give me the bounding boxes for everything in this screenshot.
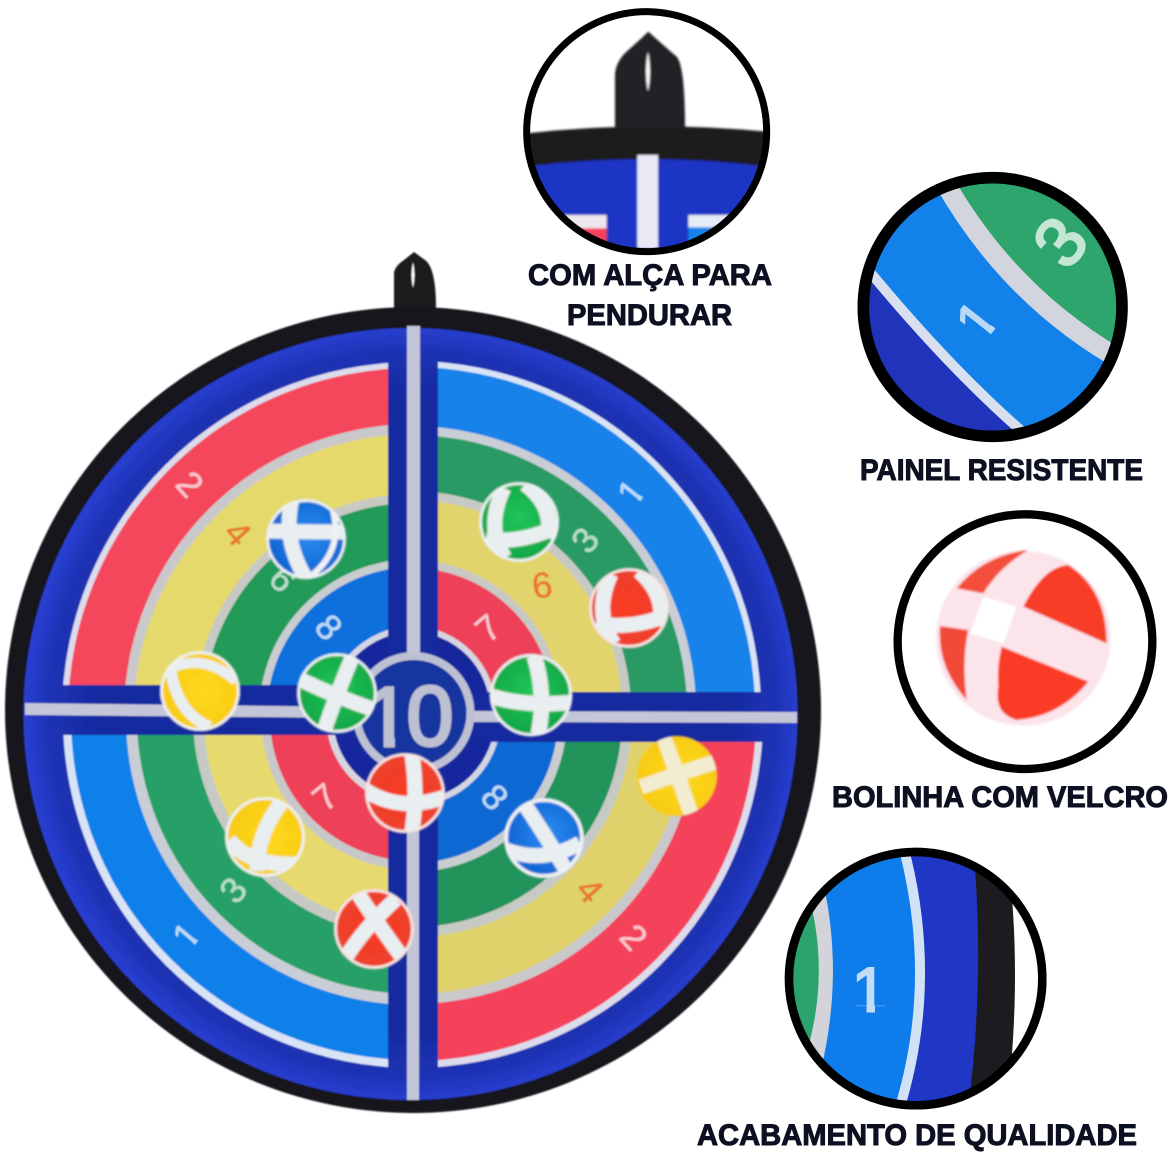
ring numbers: 1: [609, 472, 653, 513]
ball: yellow left: [160, 651, 240, 731]
ring numbers: 7: [304, 775, 346, 819]
ring numbers: 7: [467, 606, 509, 650]
ring numbers: 3: [211, 869, 255, 911]
ring numbers: 6: [529, 563, 555, 607]
label: acabamento de qualidade: ACABAMENTO DE QUALIDADE: [697, 1119, 1137, 1152]
label: pendurar: PENDURAR: [567, 299, 732, 332]
ring numbers: 2: [168, 463, 212, 505]
magnified loop circle: [510, 12, 777, 260]
hanging loop: [394, 252, 436, 308]
label: bolinha com velcro: BOLINHA COM VELCRO: [832, 781, 1168, 814]
bullseye 10: 1: [364, 670, 411, 764]
ball: green left centre: [297, 653, 377, 733]
callout: resistant panel: [858, 172, 1142, 481]
magnified ring circle: 3: [1018, 203, 1103, 281]
velcro balls: [160, 482, 717, 969]
ring numbers: 6: [261, 558, 305, 600]
ball: blue bottom right: [504, 798, 584, 878]
ball: green right centre: [488, 654, 574, 736]
quadrant: top left rings: [62, 362, 390, 686]
label: com alça: COM ALÇA PARA: [528, 259, 772, 292]
quadrant: bottom right rings: [436, 740, 764, 1068]
ring numbers: 3: [563, 520, 607, 561]
cross bars: [25, 326, 797, 1100]
ball: red centre: [365, 753, 445, 833]
ball: green top right: [479, 482, 559, 562]
label: painel resistente: PAINEL RESISTENTE: [860, 454, 1143, 487]
magnified ball circle: [898, 514, 1152, 769]
ball: yellow right: [637, 736, 717, 816]
magnified ring circle: 1: [943, 289, 1011, 351]
callout: velcro ball: [832, 514, 1168, 814]
ring numbers: 4: [568, 869, 612, 911]
magnified ring circle: [858, 172, 1128, 442]
ring numbers: 8: [307, 606, 351, 648]
ring numbers: 4: [216, 512, 260, 554]
callout: quality finish: [697, 847, 1137, 1152]
blue board face: [24, 328, 798, 1100]
ring numbers: 8: [473, 776, 517, 818]
magnified edge circle: [773, 847, 1042, 1107]
ring numbers: [164, 463, 656, 958]
dartboard: [5, 252, 821, 1113]
black rim: [5, 307, 821, 1113]
quadrant: top right rings: [436, 360, 762, 694]
ball: red bottom: [334, 889, 414, 969]
quadrant: bottom left rings: [62, 734, 390, 1068]
bullseye 10: 0: [407, 669, 453, 763]
ring numbers: 2: [612, 916, 656, 958]
magnified edge circle: 1: [852, 956, 887, 1026]
ring numbers: 1: [164, 914, 208, 956]
ball: yellow bottom left: [225, 797, 305, 877]
bullseye 10: [352, 652, 474, 774]
ball: red top right: [589, 568, 669, 648]
ball: blue top left: [266, 499, 346, 580]
callout: hanging loop: [510, 12, 777, 292]
